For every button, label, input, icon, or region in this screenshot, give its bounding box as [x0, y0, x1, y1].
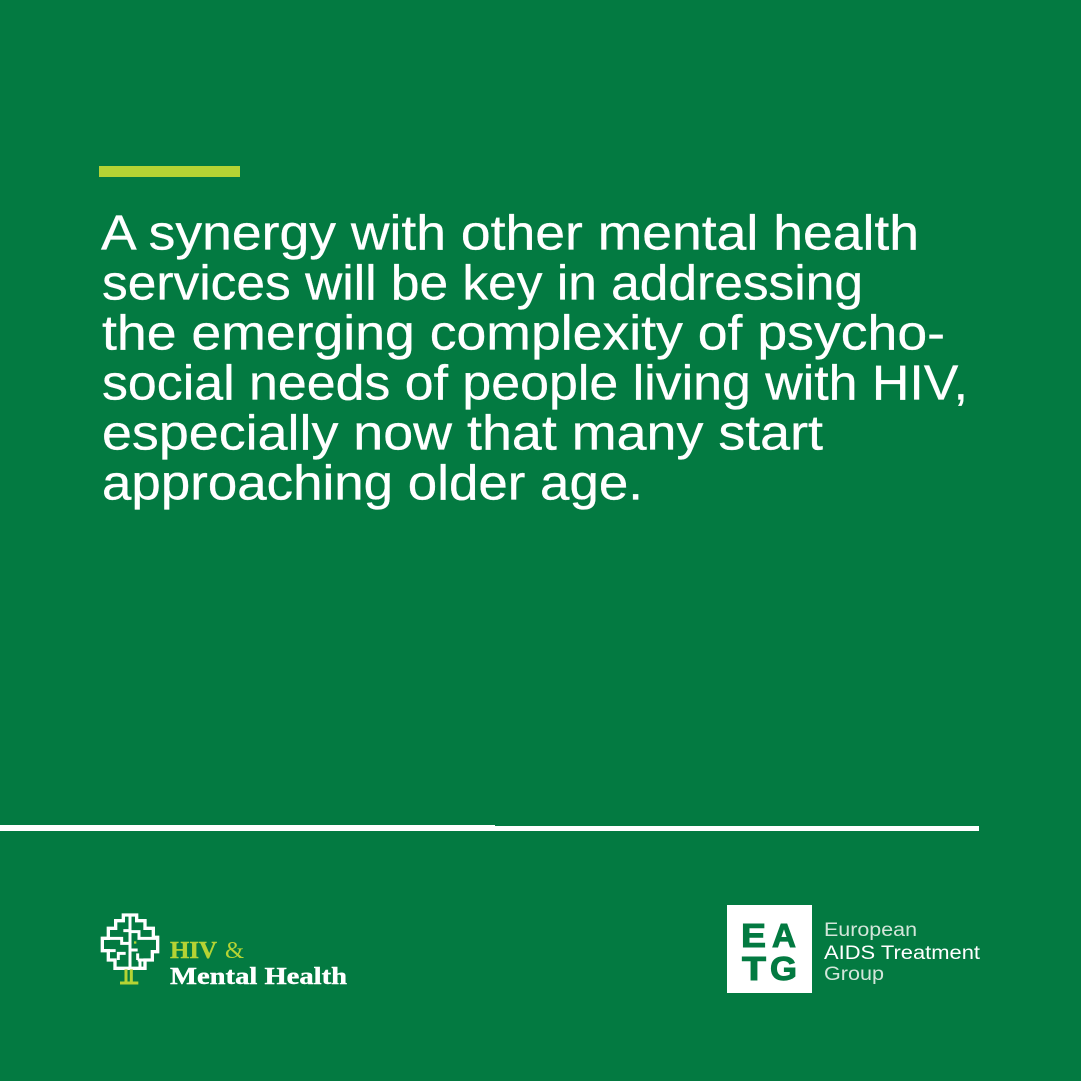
- quote text: approaching older age.: [102, 457, 643, 511]
- logo: HIV & Mental Health: [102, 915, 347, 990]
- logo mark: A: [772, 917, 796, 954]
- logo text: Mental Health: [170, 964, 347, 990]
- quote text: A synergy with other mental health: [101, 207, 919, 261]
- quote text: especially now that many start: [102, 407, 823, 461]
- organisation name: Group: [824, 964, 884, 985]
- accent bar: [99, 166, 240, 177]
- logo text: &: [225, 938, 244, 964]
- logo mark: T: [742, 950, 766, 987]
- logo mark: [727, 905, 812, 993]
- quote text: social needs of people living with HIV,: [102, 357, 968, 411]
- logo text: [170, 938, 347, 990]
- divider line: [0, 825, 979, 831]
- organisation name: European: [824, 920, 917, 941]
- icon: brain tree: [102, 915, 158, 983]
- quote text: services will be key in addressing: [102, 257, 863, 311]
- logo text: HIV: [170, 938, 218, 964]
- organisation name: AIDS Treatment: [824, 943, 981, 964]
- quote text: the emerging complexity of psycho-: [102, 307, 945, 361]
- logo mark: E: [741, 917, 766, 954]
- organisation name: [824, 920, 981, 985]
- quote text: [101, 207, 968, 511]
- logo: EATG: [727, 905, 981, 993]
- logo mark: G: [770, 950, 797, 987]
